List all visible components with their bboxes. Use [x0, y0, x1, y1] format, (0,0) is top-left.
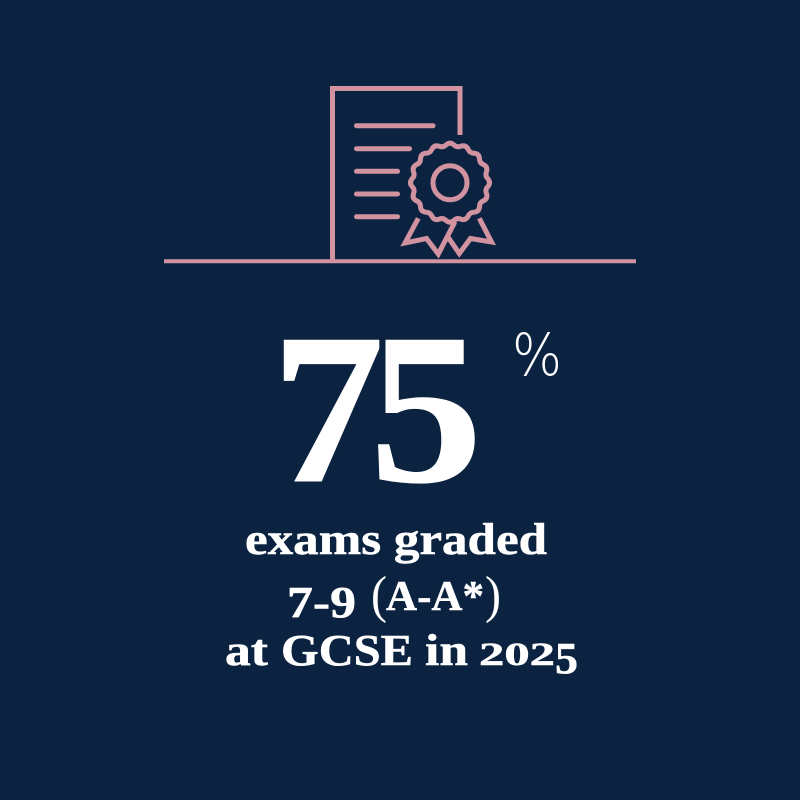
caption line 2: 7-9	[287, 578, 356, 627]
icon: certificate with rosette	[164, 88, 636, 261]
caption line 3: in	[425, 626, 468, 675]
caption line 1: exams graded	[245, 515, 547, 564]
caption line 3: 5	[555, 634, 578, 683]
caption line 2	[287, 567, 501, 627]
rosette inner circle	[433, 166, 467, 200]
percent sign: %	[512, 321, 562, 389]
caption line 3: at	[225, 626, 268, 675]
right ribbon	[448, 218, 492, 254]
caption line 3: GCSE	[281, 626, 413, 675]
caption line 2: )	[485, 567, 501, 624]
caption line 2: (	[371, 567, 387, 624]
rosette seal edge	[410, 143, 490, 222]
caption line 3	[225, 626, 578, 683]
caption	[225, 515, 578, 683]
document outline	[332, 88, 460, 261]
big number: 75: 75	[271, 290, 482, 528]
baseline rule	[164, 259, 636, 263]
caption line 3: 202	[479, 637, 555, 673]
document text lines	[356, 126, 433, 217]
left ribbon	[405, 218, 455, 254]
caption line 2: A-A*	[386, 574, 484, 620]
